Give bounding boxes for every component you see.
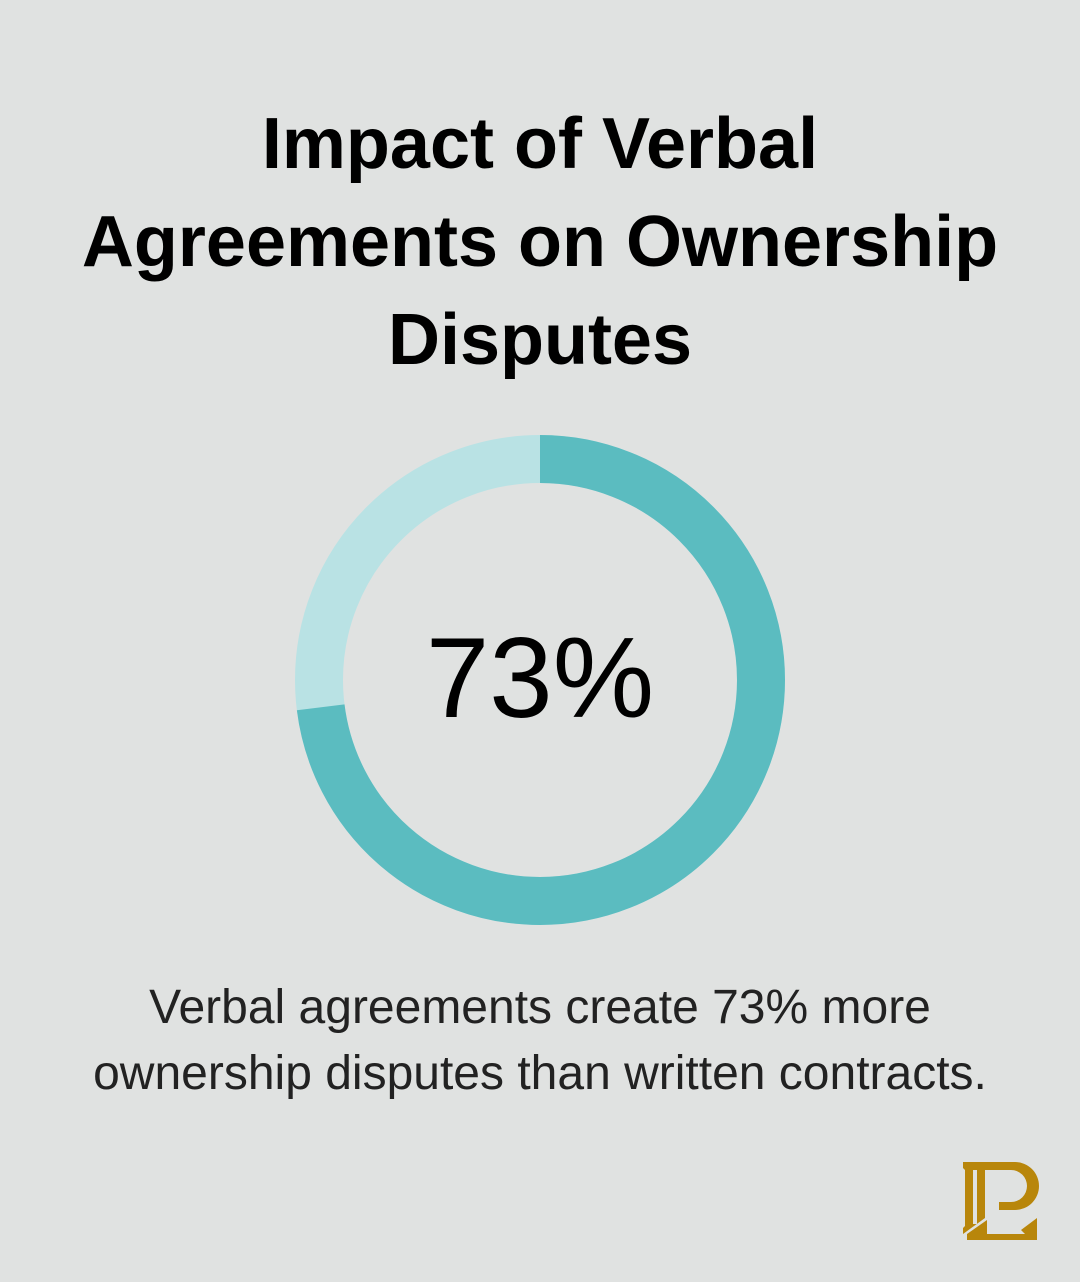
caption: Verbal agreements create 73% more [149,981,931,1034]
title [82,104,998,380]
caption [93,981,987,1100]
title: Agreements on Ownership [82,202,998,282]
donut background ring [319,459,761,901]
caption: ownership disputes than written contracts. [93,1047,987,1100]
center value: 73% [426,615,654,742]
icon: logo [963,1162,1039,1240]
title: Impact of Verbal [262,104,818,184]
title: Disputes [388,300,692,380]
donut 73% arc [319,459,761,901]
